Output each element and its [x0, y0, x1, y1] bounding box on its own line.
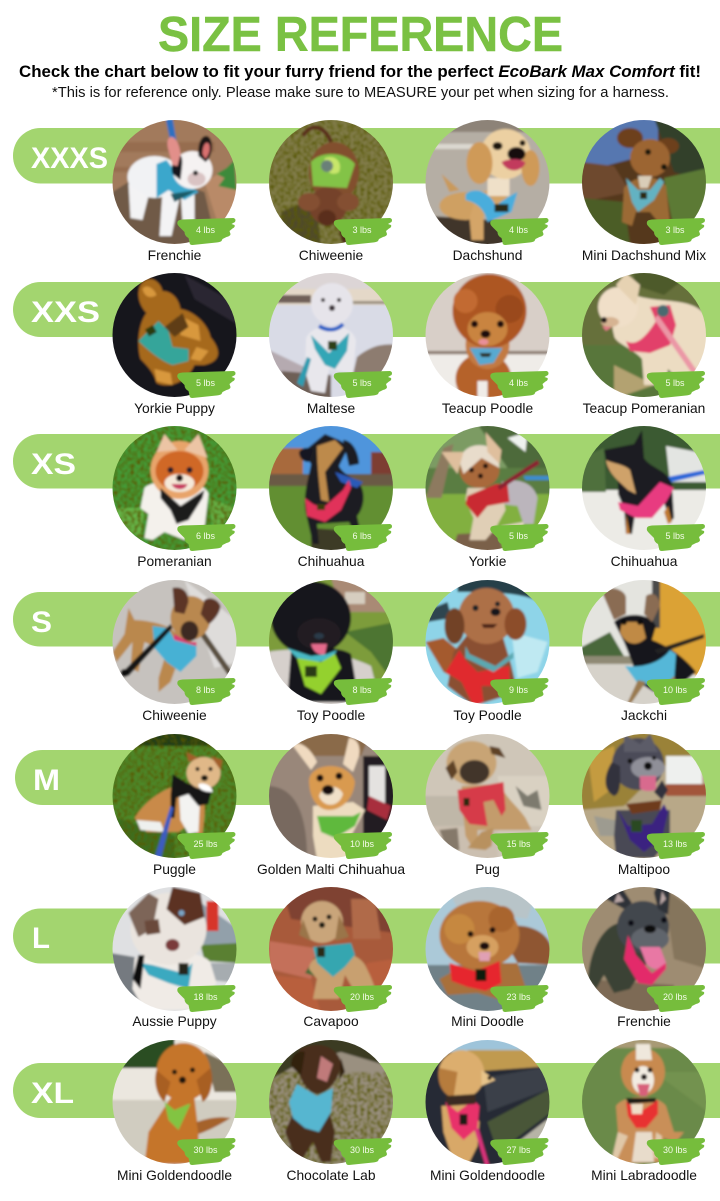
card: Aussie Puppy: [110, 885, 238, 1029]
photo: Frenchie: [110, 118, 238, 246]
weight badge: [647, 1138, 705, 1165]
weight badge: [334, 524, 392, 551]
breed name: Toy Poodle: [453, 708, 522, 723]
weight badge: 3 lbs: [665, 225, 685, 235]
photo: Jackchi: [580, 578, 708, 706]
breed name: Jackchi: [621, 708, 667, 723]
photo: Toy Poodle 2: [424, 578, 552, 706]
weight badge: 4 lbs: [509, 225, 529, 235]
weight badge: [647, 218, 705, 245]
photo: Mini Dachshund Mix: [580, 118, 708, 246]
weight badge: 3 lbs: [352, 225, 372, 235]
row: L: [13, 885, 720, 1029]
card: Chiweenie: [267, 118, 395, 263]
photo: Chocolate Lab: [267, 1038, 395, 1166]
breed name: Aussie Puppy: [132, 1014, 217, 1029]
weight badge: [490, 832, 548, 859]
breed name: Maltese: [307, 401, 355, 416]
title: SIZE REFERENCE: [158, 8, 563, 62]
card: Golden Malti Chihuahua: [257, 732, 405, 877]
photo: Aussie Puppy: [110, 885, 238, 1013]
weight badge: 10 lbs: [663, 685, 688, 695]
weight badge: 9 lbs: [509, 685, 529, 695]
weight badge: 6 lbs: [196, 531, 216, 541]
size label XXXS: XXXS: [31, 142, 108, 175]
breed name: Chihuahua: [611, 554, 678, 569]
weight badge: 5 lbs: [196, 378, 216, 388]
card: Frenchie 2: [580, 885, 708, 1029]
breed name: Teacup Pomeranian: [583, 401, 705, 416]
weight badge: 6 lbs: [352, 531, 372, 541]
subtitle: Check the chart below to fit your furry friend for the perfect EcoBark Max Comfort fit!: [19, 63, 701, 81]
card: Teacup Pomeranian: [580, 271, 708, 416]
weight badge: 8 lbs: [196, 685, 216, 695]
breed name: Mini Labradoodle: [591, 1168, 697, 1183]
breed name: Frenchie: [617, 1014, 671, 1029]
card: Puggle: [110, 732, 238, 877]
photo: Pomeranian: [110, 424, 238, 552]
size label S: S: [31, 606, 52, 639]
size label XXS: XXS: [31, 296, 100, 329]
card: Chiweenie 2: [110, 578, 238, 723]
photo: Mini Goldendoodle: [110, 1038, 238, 1166]
weight badge: [647, 678, 705, 705]
weight badge: [177, 832, 236, 859]
photo: Maltipoo: [580, 732, 708, 860]
weight badge: 27 lbs: [506, 1145, 531, 1155]
photo: Pug: [424, 732, 552, 860]
disclaimer note: *This is for reference only. Please make sure to MEASURE your pet when sizing for a harness.: [52, 85, 669, 101]
weight badge: [334, 371, 392, 398]
card: Toy Poodle 2: [424, 578, 552, 723]
row: XXS: [13, 271, 720, 416]
weight badge: [177, 985, 236, 1012]
row: M: [15, 732, 720, 877]
card: Pomeranian: [110, 424, 238, 569]
breed name: Chiweenie: [299, 248, 364, 263]
photo: Puggle: [110, 732, 238, 860]
breed name: Mini Doodle: [451, 1014, 524, 1029]
weight badge: 30 lbs: [350, 1145, 375, 1155]
photo: Golden Malti Chihuahua: [267, 732, 395, 860]
breed name: Chihuahua: [298, 554, 365, 569]
weight badge: [334, 678, 392, 705]
card: Frenchie: [110, 118, 238, 263]
card: Mini Labradoodle: [580, 1038, 708, 1183]
row: XXXS: [13, 118, 720, 263]
card: Mini Doodle: [424, 885, 552, 1029]
size band L: [13, 908, 720, 964]
card: Pug: [424, 732, 552, 877]
weight badge: [490, 218, 548, 245]
card: Mini Goldendoodle 2: [424, 1038, 552, 1183]
weight badge: 20 lbs: [350, 992, 375, 1002]
breed name: Dachshund: [453, 248, 522, 263]
weight badge: [490, 678, 548, 705]
size band XS: [13, 434, 720, 488]
size band XL: [13, 1063, 720, 1118]
card: Jackchi: [580, 578, 708, 723]
weight badge: [177, 678, 236, 705]
breed name: Yorkie Puppy: [134, 401, 215, 416]
size label M: M: [33, 764, 60, 797]
card: Yorkie Puppy: [110, 271, 238, 416]
weight badge: [177, 1138, 236, 1165]
photo: Mini Doodle: [424, 885, 552, 1013]
weight badge: [334, 985, 392, 1012]
row: XL: [13, 1038, 720, 1183]
card: Maltipoo: [580, 732, 708, 877]
weight badge: [490, 1138, 548, 1165]
weight badge: [177, 218, 236, 245]
breed name: Mini Goldendoodle: [430, 1168, 545, 1183]
weight badge: [490, 371, 548, 398]
photo: Chihuahua: [267, 424, 395, 552]
weight badge: 5 lbs: [665, 531, 685, 541]
photo: Dachshund: [424, 118, 552, 246]
weight badge: 30 lbs: [193, 1145, 218, 1155]
weight badge: 23 lbs: [506, 992, 531, 1002]
breed name: Maltipoo: [618, 862, 670, 877]
card: Maltese: [267, 271, 395, 416]
photo: Mini Goldendoodle 2: [424, 1038, 552, 1166]
breed name: Chiweenie: [142, 708, 207, 723]
breed name: Golden Malti Chihuahua: [257, 862, 405, 877]
breed name: Mini Goldendoodle: [117, 1168, 232, 1183]
weight badge: 20 lbs: [663, 992, 688, 1002]
weight badge: 13 lbs: [663, 839, 688, 849]
size band XXXS: [13, 128, 720, 184]
photo: Chiweenie: [267, 118, 395, 246]
weight badge: 8 lbs: [352, 685, 372, 695]
breed name: Teacup Poodle: [442, 401, 533, 416]
photo: Frenchie 2: [580, 885, 708, 1013]
weight badge: 30 lbs: [663, 1145, 688, 1155]
weight badge: [177, 371, 236, 398]
photo: Chihuahua 2: [580, 424, 708, 552]
breed name: Cavapoo: [303, 1014, 359, 1029]
card: Cavapoo: [267, 885, 395, 1029]
photo: Chiweenie 2: [110, 578, 238, 706]
weight badge: 25 lbs: [193, 839, 218, 849]
weight badge: 5 lbs: [665, 378, 685, 388]
size band M: [15, 750, 720, 805]
card: Chihuahua 2: [580, 424, 708, 569]
weight badge: 10 lbs: [350, 839, 375, 849]
card: Dachshund: [424, 118, 552, 263]
weight badge: 15 lbs: [506, 839, 531, 849]
size band S: [13, 592, 720, 646]
weight badge: 4 lbs: [196, 225, 216, 235]
card: Chihuahua: [267, 424, 395, 569]
weight badge: [647, 832, 705, 859]
breed name: Pug: [475, 862, 500, 877]
breed name: Frenchie: [148, 248, 202, 263]
card: Toy Poodle: [267, 578, 395, 723]
weight badge: 18 lbs: [193, 992, 218, 1002]
row: S: [13, 578, 720, 723]
breed name: Mini Dachshund Mix: [582, 248, 706, 263]
card: Mini Dachshund Mix: [580, 118, 708, 263]
weight badge: [647, 524, 705, 551]
breed name: Pomeranian: [137, 554, 212, 569]
size label L: L: [32, 922, 50, 955]
photo: Teacup Pomeranian: [580, 271, 708, 399]
card: Chocolate Lab: [267, 1038, 395, 1183]
weight badge: [334, 832, 392, 859]
breed name: Toy Poodle: [297, 708, 365, 723]
row: XS: [13, 424, 720, 569]
weight badge: [177, 524, 236, 551]
weight badge: [334, 1138, 392, 1165]
weight badge: 4 lbs: [509, 378, 529, 388]
weight badge: [334, 218, 392, 245]
weight badge: [647, 985, 705, 1012]
weight badge: 5 lbs: [352, 378, 372, 388]
card: Mini Goldendoodle: [110, 1038, 238, 1183]
weight badge: [490, 985, 548, 1012]
photo: Yorkie: [424, 424, 552, 552]
weight badge: [490, 524, 548, 551]
card: Teacup Poodle: [424, 271, 552, 416]
breed name: Puggle: [153, 862, 196, 877]
weight badge: [647, 371, 705, 398]
photo: Mini Labradoodle: [580, 1038, 708, 1166]
photo: Maltese: [267, 271, 395, 399]
photo: Toy Poodle: [267, 578, 395, 706]
photo: Yorkie Puppy: [110, 271, 238, 399]
size band XXS: [13, 282, 720, 337]
size label XL: XL: [31, 1077, 74, 1110]
size label XS: XS: [31, 448, 76, 481]
photo: Teacup Poodle: [426, 273, 550, 397]
breed name: Yorkie: [469, 554, 507, 569]
breed name: Chocolate Lab: [287, 1168, 376, 1183]
weight badge: 5 lbs: [509, 531, 529, 541]
card: Yorkie: [424, 424, 552, 569]
photo: Cavapoo: [267, 885, 395, 1013]
